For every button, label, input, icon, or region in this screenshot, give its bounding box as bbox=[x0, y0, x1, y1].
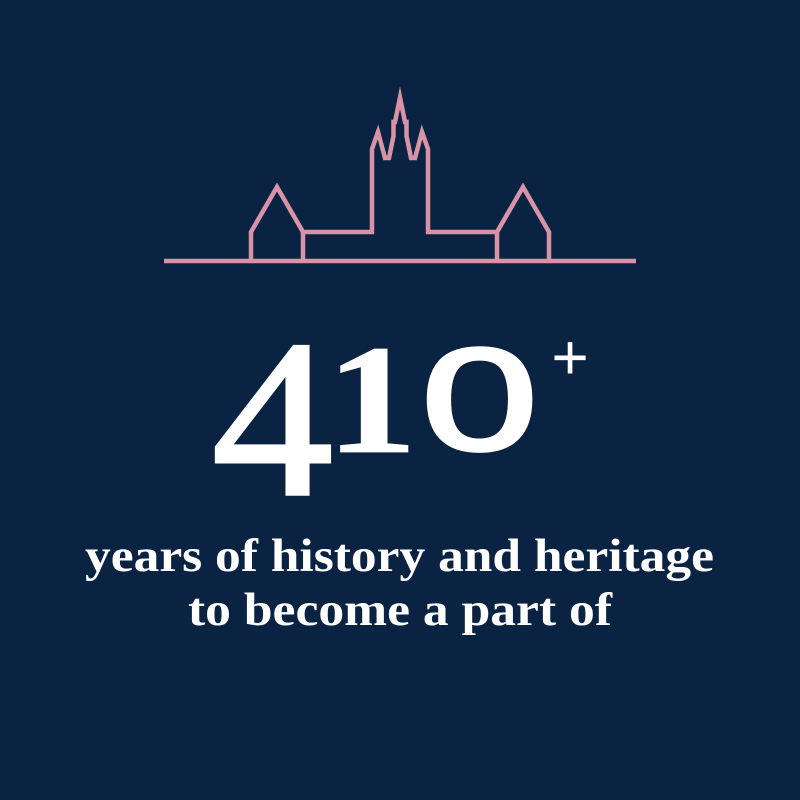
digit 1: 1 bbox=[326, 313, 417, 486]
caption line 2: to become a part of bbox=[188, 584, 613, 636]
castle outline bbox=[251, 98, 549, 261]
ground line bbox=[164, 259, 636, 263]
icon: castle skyline bbox=[164, 98, 636, 261]
caption text bbox=[85, 530, 714, 636]
plus sign: + bbox=[551, 321, 589, 393]
caption line 1: years of history and heritage bbox=[85, 530, 714, 582]
digit 4: 4 bbox=[212, 295, 333, 543]
digit 0: 0 bbox=[422, 319, 538, 481]
big number: 410+ bbox=[212, 295, 589, 543]
